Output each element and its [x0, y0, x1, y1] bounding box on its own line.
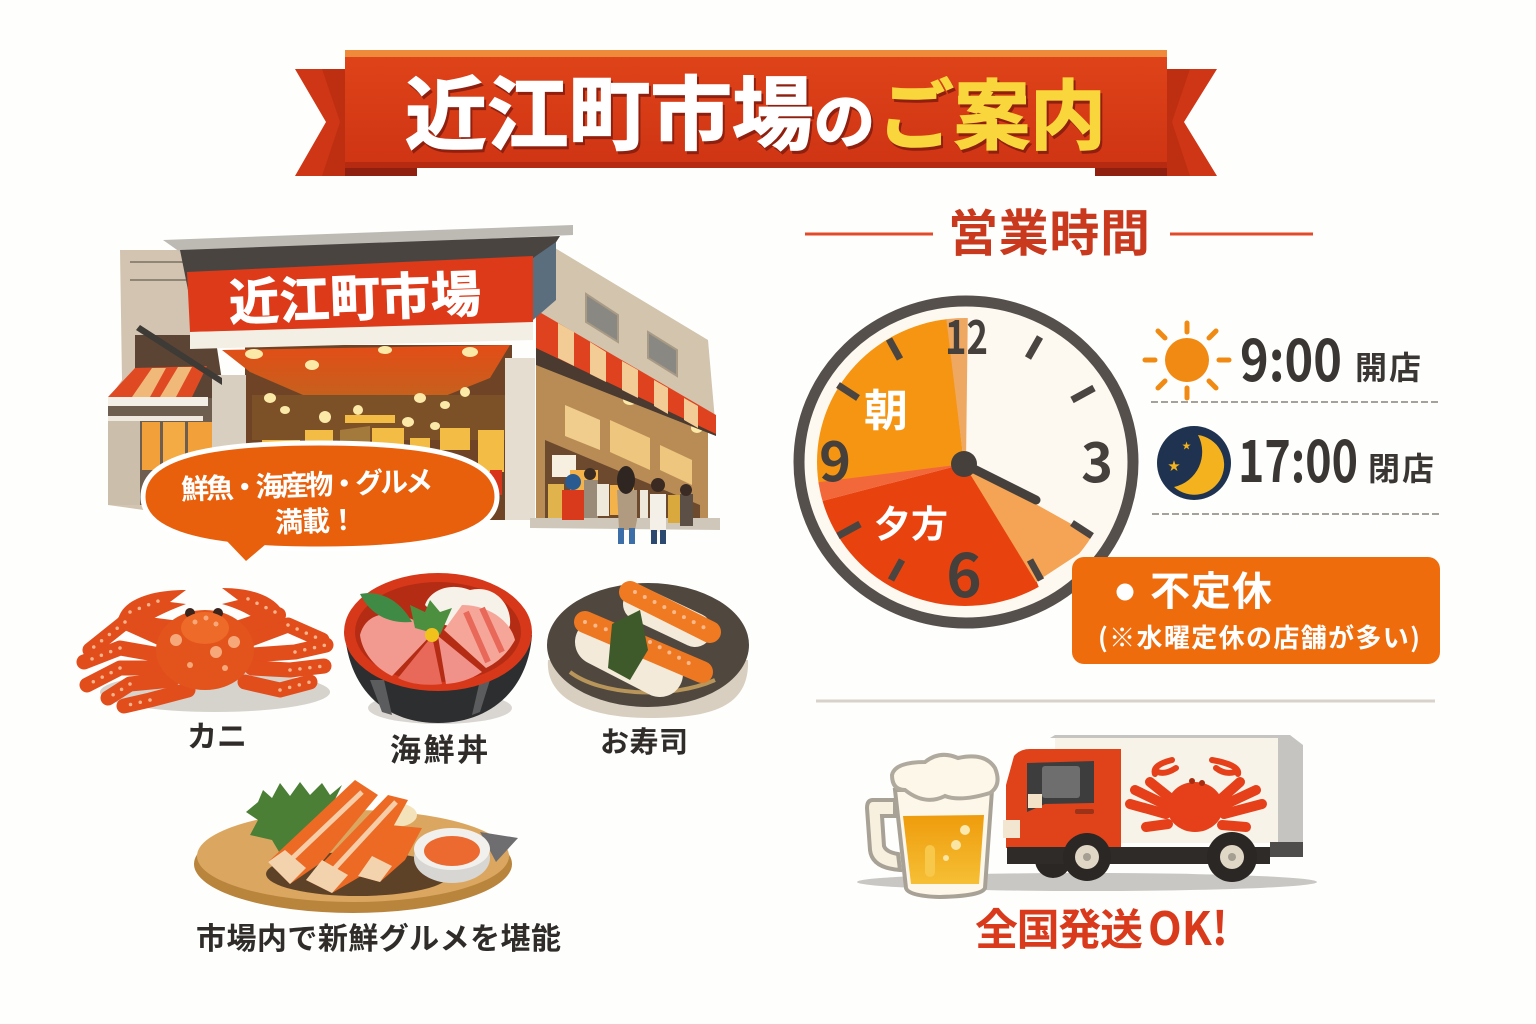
- callout: irregular holidays: [1072, 557, 1440, 664]
- beer mug: [867, 755, 998, 897]
- shoppers group: [548, 466, 693, 544]
- icon: crab: [84, 588, 330, 712]
- title accent text: ご案内: [878, 55, 1106, 165]
- opening time: 9:00: [1240, 316, 1342, 398]
- clock numerals: 12: [945, 302, 988, 368]
- title text: 近江町市場の: [405, 51, 875, 167]
- clock numerals: [819, 302, 1113, 615]
- truck: [1003, 735, 1303, 882]
- caption: plate: 市場内で新鮮グルメを堪能: [196, 914, 561, 958]
- icon: beer and delivery truck: [857, 735, 1317, 897]
- divider dashed 1: [1151, 401, 1440, 403]
- closing label: 閉店: [1368, 444, 1434, 490]
- shipping ok: OK!: [1148, 893, 1228, 959]
- icon: moon: ★: [1168, 459, 1180, 473]
- market building illustration: [108, 225, 720, 544]
- callout note: (※水曜定休の店舗が多い): [1098, 618, 1420, 655]
- divider: [816, 700, 1435, 702]
- clock numerals: 9: [819, 418, 851, 497]
- clock numerals: 6: [946, 528, 982, 615]
- icon: sun: [1145, 323, 1229, 398]
- bubble text line 1: 鮮魚・海産物・グルメ: [180, 460, 434, 508]
- clock numerals: 3: [1081, 419, 1113, 498]
- caption: sushi: お寿司: [600, 719, 688, 761]
- title banner: [295, 50, 1217, 176]
- caption: crab: カニ: [187, 712, 247, 756]
- icon: crab logo: [1130, 760, 1262, 832]
- label: morning: 朝: [864, 375, 908, 439]
- closing time: 17:00: [1238, 417, 1358, 499]
- icon: seafood bowl: [344, 573, 532, 724]
- shipping text: 全国発送: [975, 896, 1143, 958]
- icon: moon: [1157, 426, 1231, 500]
- clock: [780, 300, 1133, 640]
- icon: sushi plate: [547, 583, 749, 718]
- caption: seafood bowl: 海鮮丼: [390, 725, 488, 770]
- bubble text line 2: 満載！: [274, 499, 358, 541]
- callout heading: 不定休: [1150, 559, 1272, 617]
- opening label: 開店: [1355, 343, 1421, 389]
- label: evening: 夕方: [874, 494, 948, 548]
- heading text: 営業時間: [948, 194, 1150, 266]
- speech bubble: [143, 443, 497, 561]
- divider dashed 2: [1152, 513, 1440, 515]
- icon: crab leg plate: [194, 780, 518, 913]
- sign text: 近江町市場: [228, 255, 482, 335]
- icon: moon: ★: [1182, 441, 1191, 451]
